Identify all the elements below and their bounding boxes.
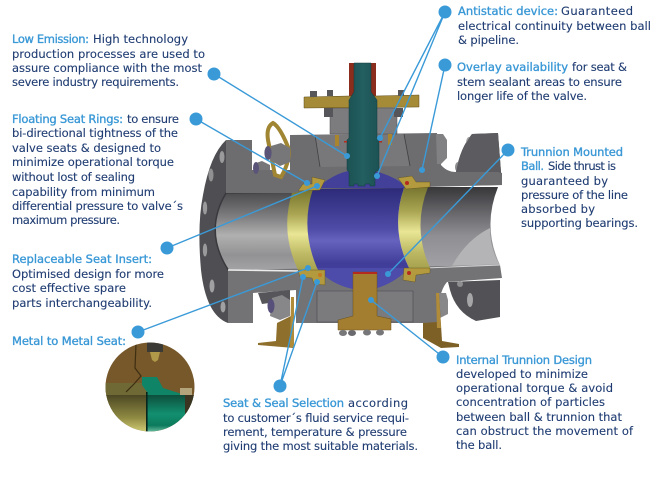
text: replaceable seat insert: parts interchangeability. bbox=[12, 296, 152, 310]
text: trunnion mounted ball bbox=[520, 145, 638, 230]
left flange rim with bolt holes bbox=[199, 140, 240, 323]
guide pins bbox=[335, 134, 392, 146]
callout line: metal to metal seat bbox=[132, 265, 311, 338]
text: low emission bbox=[12, 32, 205, 89]
stem sleeve bbox=[349, 63, 376, 97]
text: seat and seal selection: giving the most suitable materials. bbox=[223, 439, 418, 453]
callout line: overlay availability bbox=[419, 58, 452, 173]
text: seat and seal selection: according bbox=[348, 396, 408, 410]
text: overlay availability: Overlay availability bbox=[457, 60, 568, 74]
text: floating seat rings: Floating Seat Rings: bbox=[12, 112, 123, 126]
text: overlay availability bbox=[457, 60, 627, 103]
stem bbox=[347, 63, 379, 186]
callout line: low emission bbox=[208, 68, 350, 159]
text: low emission: assure compliance with the most bbox=[12, 61, 202, 75]
gland flange bbox=[304, 90, 419, 108]
bottom trunnion bbox=[338, 272, 391, 336]
text: overlay availability: stem sealant areas to ensure bbox=[457, 75, 622, 89]
text: trunnion mounted ball: pressure of the line bbox=[521, 188, 628, 202]
lifting eye and bolts bbox=[253, 123, 447, 177]
text: antistatic device: Antistatic device: bbox=[458, 4, 558, 18]
text: antistatic device bbox=[458, 4, 651, 47]
text: floating seat rings: valve seats & designed to bbox=[12, 141, 161, 155]
callout lines: seat and seal selection bbox=[274, 274, 320, 392]
text: internal trunnion design: concentration of particles bbox=[456, 395, 605, 409]
callout line: internal trunnion design bbox=[368, 297, 450, 364]
seat pockets bbox=[298, 176, 430, 285]
callout line: replaceable seat insert bbox=[160, 183, 320, 254]
callout line: floating seat rings bbox=[190, 112, 310, 186]
text: floating seat rings: maximum pressure. bbox=[12, 213, 120, 227]
text: antistatic device: Guaranteed bbox=[561, 4, 633, 18]
right flange, back faces bbox=[448, 133, 502, 321]
lower right bolt and support foot bbox=[423, 293, 459, 348]
lower body casting bbox=[228, 265, 502, 323]
text: replaceable seat insert bbox=[12, 252, 164, 310]
text: trunnion mounted ball: guaranteed by bbox=[521, 174, 608, 188]
text: floating seat rings: bi-directional tightness of the bbox=[12, 126, 178, 140]
callout lines: antistatic device bbox=[374, 6, 452, 179]
text: replaceable seat insert: cost effective spare bbox=[12, 281, 126, 295]
ball bbox=[307, 170, 409, 289]
bore bbox=[215, 187, 500, 271]
text: internal trunnion design bbox=[456, 353, 634, 452]
text: seat and seal selection: Seat & Seal Selection bbox=[223, 396, 344, 410]
text: floating seat rings: to ensure bbox=[127, 112, 179, 126]
text: floating seat rings: capability from minimum bbox=[12, 185, 155, 199]
text: seat and seal selection bbox=[223, 396, 418, 453]
text: internal trunnion design: Internal Trunnion Design bbox=[456, 353, 592, 367]
text: floating seat rings bbox=[12, 112, 183, 227]
seat rings bbox=[287, 187, 430, 270]
text: internal trunnion design: can obstruct the movement of bbox=[456, 424, 634, 438]
lower left bolt and support foot bbox=[258, 290, 294, 348]
text: low emission: production processes are used to bbox=[12, 47, 205, 61]
text: internal trunnion design: developed to minimize bbox=[456, 367, 588, 381]
text: trunnion mounted ball: Side thrust is bbox=[548, 159, 616, 173]
text: metal to metal seat: Metal to Metal Seat: bbox=[12, 334, 126, 348]
text: internal trunnion design: the ball. bbox=[456, 438, 502, 452]
valve cutaway illustration bbox=[199, 63, 502, 348]
callout line: trunnion mounted ball bbox=[385, 144, 514, 277]
text: floating seat rings: without lost of sealing bbox=[12, 170, 135, 184]
text: seat and seal selection: to customer´s fluid service requi- bbox=[223, 411, 409, 425]
text: replaceable seat insert: Optimised design for more bbox=[12, 267, 164, 281]
text: trunnion mounted ball: Ball. bbox=[521, 159, 544, 173]
text: low emission: severe industry requirements. bbox=[12, 75, 179, 89]
text: overlay availability: longer life of the valve. bbox=[457, 89, 587, 103]
text: low emission: Low Emission: bbox=[12, 32, 89, 46]
upper body casting bbox=[226, 133, 502, 193]
text: trunnion mounted ball: absorbed by bbox=[521, 202, 595, 216]
text: replaceable seat insert: Replaceable Seat Insert: bbox=[12, 252, 152, 266]
text: internal trunnion design: between ball & trunnion that bbox=[456, 410, 622, 424]
text: antistatic device: & pipeline. bbox=[458, 33, 519, 47]
text: antistatic device: electrical continuity between ball bbox=[458, 19, 651, 33]
text: low emission: High technology bbox=[93, 32, 188, 46]
gland gray housing bbox=[324, 108, 403, 134]
text: seat and seal selection: rement, temperature & pressure bbox=[223, 425, 407, 439]
text: trunnion mounted ball: supporting bearings. bbox=[521, 216, 638, 230]
text: overlay availability: for seat & bbox=[572, 60, 627, 74]
text: trunnion mounted ball: Trunnion Mounted bbox=[520, 145, 623, 159]
metal to metal seat detail circle bbox=[105, 342, 196, 433]
text: internal trunnion design: operational torque & avoid bbox=[456, 381, 613, 395]
text: floating seat rings: differential pressure to valve´s bbox=[12, 199, 183, 213]
text: floating seat rings: minimize operational torque bbox=[12, 155, 174, 169]
